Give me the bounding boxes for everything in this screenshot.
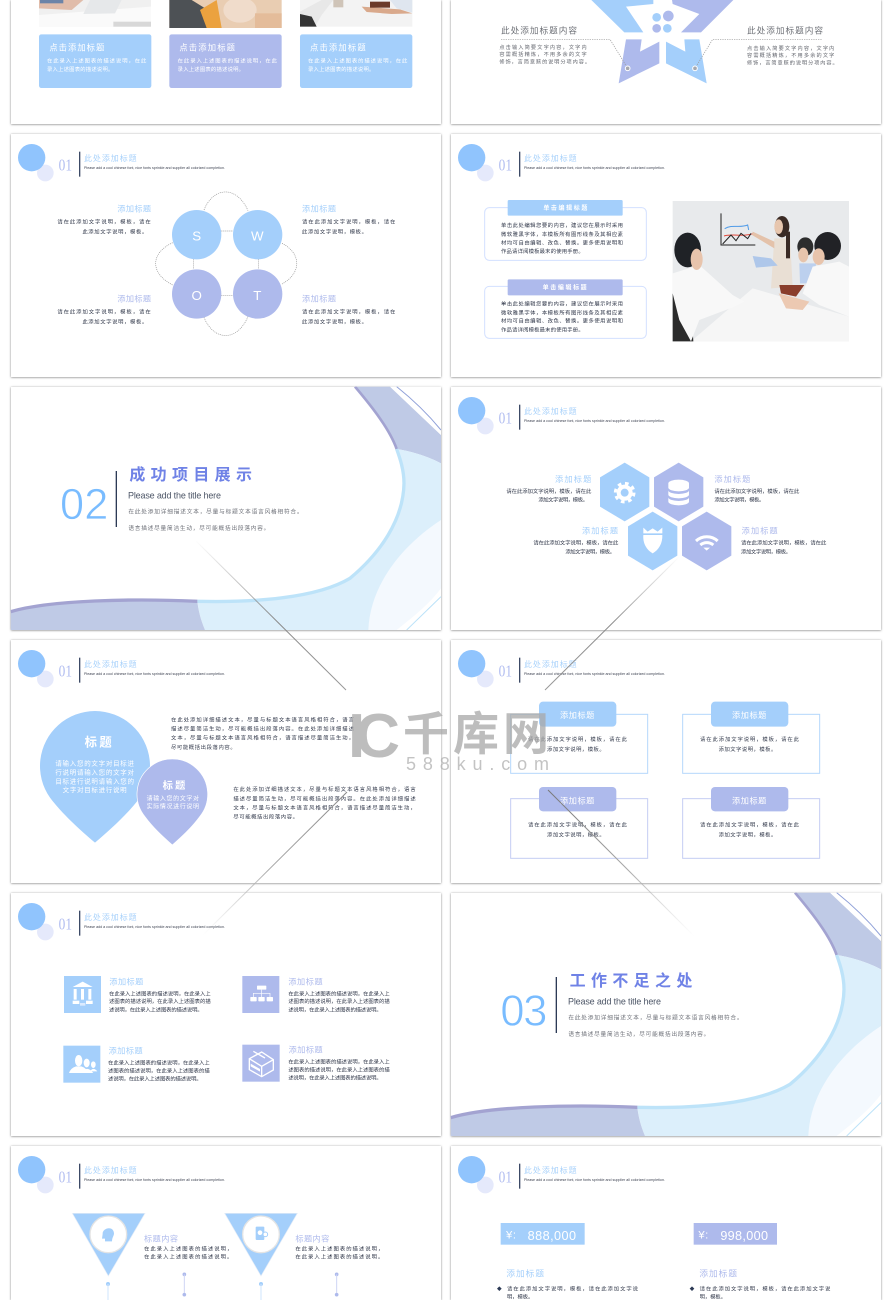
text block: left: 修饰，言简意赅的说明分项内容。 xyxy=(499,57,590,65)
box: bottom left xyxy=(511,787,648,858)
text block: T xyxy=(302,293,395,325)
text block: gear: 请在此添加文字说明，模板，请在此 xyxy=(506,487,592,495)
divider bar xyxy=(116,471,117,527)
price tag: 888,000 xyxy=(501,1223,585,1245)
text block: box: 述说明，在此录入上述图表的描述说明。 xyxy=(288,1074,382,1082)
teardrop: small: 实际情况进行说明 xyxy=(147,803,199,811)
text block: W xyxy=(302,203,395,235)
box: top right: 添加标题 xyxy=(732,710,766,720)
text block: second price: 添加标题 xyxy=(699,1268,737,1279)
card: purple one: 录入上述图表的描述说明。 xyxy=(178,65,244,73)
text block: org chart: 在此录入上述图表的描述说明，在此录入上 xyxy=(288,989,390,997)
slide header: 此处添加标题 xyxy=(84,1165,137,1175)
slide header: Please add a cool chinese font, nice fonts sprinkle and supplier all colorized completion. xyxy=(524,419,665,423)
text block: gear: 添加标题 xyxy=(555,474,591,484)
paragraph: upper: 在此处添加详细描述文本，尽量与标题文本语言风格相符合，语言 xyxy=(171,715,355,723)
card: purple one xyxy=(169,34,282,88)
text block: org chart xyxy=(288,976,390,1013)
timeline connector: first purple xyxy=(182,1272,186,1296)
decorative curved background xyxy=(451,893,881,1136)
text box: second: 单击此处编辑您要的内容，建议您在展示时采用 xyxy=(501,299,623,307)
slide header: 此处添加标题 xyxy=(524,659,577,669)
slide header xyxy=(18,1156,225,1193)
box: bottom left: 请在此添加文字说明，模板，请在此 xyxy=(528,820,628,828)
slide: four titled boxes xyxy=(451,640,881,883)
slide header: Please add a cool chinese font, nice fonts sprinkle and supplier all colorized completion. xyxy=(524,166,665,170)
chart: SWOT dotted loops xyxy=(156,192,297,336)
text block: O: 此添加文字说明，模板。 xyxy=(82,317,147,325)
chart node: T xyxy=(233,269,282,319)
teardrop: large: 文字对目标进行说明 xyxy=(63,785,127,794)
text block: wifi: 请在此添加文字说明，模板，请在此 xyxy=(741,539,827,547)
text block: org chart: 添加标题 xyxy=(288,976,323,986)
card: blue one: 点击添加标题 xyxy=(49,43,105,53)
slide: teardrops xyxy=(11,640,441,883)
box: top left: 添加文字说明，模板。 xyxy=(547,745,605,753)
icon: box xyxy=(242,1045,280,1082)
text block: T: 请在此添加文字说明，模板，请在 xyxy=(302,307,395,315)
card: second blue one: 点击添加标题 xyxy=(310,43,366,53)
box: top right: 请在此添加文字说明，模板，请在此 xyxy=(700,735,800,743)
section description: 在此处添加详细描述文本，尽量与标题文本语言风格相符合。 xyxy=(568,1014,743,1022)
paragraph: lower: 描述尽量简洁生动，尽可能概括出段落内容。在此处添加详细描述 xyxy=(233,794,416,802)
slide header: 01 xyxy=(59,1167,72,1186)
text block: box: 在此录入上述图表的描述说明，在此录入上 xyxy=(288,1058,390,1066)
chart node: O: O xyxy=(191,288,202,303)
text box: second: 材均可自由编辑、改色、替换。更多使用说明和 xyxy=(501,317,623,325)
slide header xyxy=(18,650,225,687)
text block: bank xyxy=(109,976,211,1013)
hexagon: shield xyxy=(628,512,677,570)
photo: meeting table xyxy=(300,0,412,27)
price tag: 888,000: ¥: xyxy=(505,1230,516,1242)
text block: wifi xyxy=(741,526,827,555)
timeline connector: first blue xyxy=(106,1282,110,1300)
section number: 02 xyxy=(60,481,108,529)
chart node: W: W xyxy=(251,229,264,244)
text block: first price: 请在此添加文字说明，模板，请在此添加文字说 xyxy=(507,1285,639,1293)
text block: O: 请在此添加文字说明，模板，请在 xyxy=(57,307,151,315)
card: second blue one: 在此录入上述图表的描述说明，在此 xyxy=(308,57,408,65)
text box: first: 单击此处编辑您要的内容，建议您在展示时采用 xyxy=(501,221,623,229)
text block: left: 容需概括精炼，不用多余的文字 xyxy=(499,50,587,58)
section description: 语言描述尽量简洁生动，尽可能概括出段落内容。 xyxy=(128,524,269,532)
text block: right: 容需概括精炼，不用多余的文字 xyxy=(747,51,834,59)
text block: box: 述图表的描述说明，在此录入上述图表的描 xyxy=(288,1065,390,1073)
triangle: device icon xyxy=(225,1213,297,1276)
star: four arrow pieces xyxy=(591,0,733,83)
text block: shield xyxy=(533,526,619,555)
wall chart xyxy=(721,213,755,245)
slide: four icon items xyxy=(11,893,441,1136)
text block: people: 在此录入上述图表的描述说明，在此录入上 xyxy=(108,1059,210,1067)
slide header: Please add a cool chinese font, nice fonts sprinkle and supplier all colorized completion. xyxy=(84,672,225,676)
timeline connector: second blue xyxy=(259,1282,263,1300)
icon: org chart xyxy=(242,976,279,1013)
box: top left xyxy=(511,702,648,773)
paragraph: lower: 在此处添加详细描述文本，尽量与标题文本语言风格相符合，语言 xyxy=(233,785,416,793)
timeline connector: second purple xyxy=(335,1272,338,1296)
text block: left xyxy=(499,25,590,65)
card: second blue one: 录入上述图表的描述说明。 xyxy=(308,65,374,73)
teardrop: large: 请输入您的文字对目标进 xyxy=(55,759,135,768)
section title: 工作不足之处 xyxy=(570,971,692,990)
price tag: 998,000: ¥: xyxy=(697,1230,708,1242)
watermark: diagonal lines xyxy=(195,540,694,936)
text box: second: 单击编辑标题 xyxy=(543,284,587,292)
section description xyxy=(568,1014,743,1038)
text block: left: 此处添加标题内容 xyxy=(501,25,577,36)
card: blue one: 录入上述图表的描述说明。 xyxy=(47,65,113,73)
section description: 在此处添加详细描述文本，尽量与标题文本语言风格相符合。 xyxy=(128,508,303,516)
text block: second xyxy=(295,1234,383,1261)
text block: first: 标题内容 xyxy=(144,1234,178,1244)
text block: gear xyxy=(506,474,592,503)
text block: first price xyxy=(497,1268,639,1300)
text block: first: 在此录入上述图表的描述说明， xyxy=(144,1244,232,1252)
paragraph: upper: 文本，尽量与标题文本语言风格相符合，语言描述尽量简洁生动， xyxy=(171,733,354,741)
text block: box: 添加标题 xyxy=(289,1045,323,1055)
text block: wifi: 添加文字说明，模板。 xyxy=(741,547,791,555)
slide: SWOT xyxy=(11,134,441,377)
slide header xyxy=(458,397,665,434)
text block: database: 请在此添加文字说明，模板，请在此 xyxy=(714,487,800,495)
slide header: Please add a cool chinese font, nice fonts sprinkle and supplier all colorized completion. xyxy=(84,925,225,929)
box: bottom right xyxy=(683,787,820,858)
text block: right xyxy=(747,25,838,66)
slide header xyxy=(18,903,225,940)
text block: shield: 添加标题 xyxy=(582,526,618,536)
text block: W: 此添加文字说明，模板。 xyxy=(302,227,367,235)
text block: first xyxy=(144,1234,232,1261)
section description: 语言描述尽量简洁生动，尽可能概括出段落内容。 xyxy=(568,1030,709,1038)
price tag: 998,000 xyxy=(694,1223,777,1245)
text block: right: 此处添加标题内容 xyxy=(747,25,823,36)
hexagon: wifi xyxy=(682,512,731,570)
watermark: logo text: 588ku.com xyxy=(406,754,549,774)
slide header: 01 xyxy=(499,1167,512,1186)
text block: first: 在此录入上述图表的描述说明。 xyxy=(144,1253,232,1261)
text box: first: 微软雅黑字体，本模板所有图形线条及其相应素 xyxy=(501,230,624,238)
watermark: logo text xyxy=(348,702,549,774)
slide header: Please add a cool chinese font, nice fonts sprinkle and supplier all colorized completion. xyxy=(84,1178,225,1182)
box: top left: 添加标题 xyxy=(560,710,594,720)
leader line: right xyxy=(693,39,822,71)
text block: bank: 述说明，在此录入上述图表的描述说明。 xyxy=(109,1005,203,1013)
slide: star diagram xyxy=(451,0,881,124)
text box: first xyxy=(485,200,646,260)
decorative curved background xyxy=(11,387,441,630)
teardrop: small xyxy=(137,759,208,845)
slide header: 此处添加标题 xyxy=(524,153,577,163)
text block: second: 在此录入上述图表的描述说明。 xyxy=(295,1253,383,1261)
text block: W: 添加标题 xyxy=(302,203,336,213)
triangle: head icon xyxy=(72,1213,145,1276)
watermark: logo text: IC xyxy=(348,702,400,771)
watermark: logo text: 千库网 xyxy=(403,708,549,760)
chart node: T: T xyxy=(253,288,261,303)
text block: wifi: 添加标题 xyxy=(742,526,778,536)
text block: right: 点击输入简要文字内容，文字内 xyxy=(747,44,834,52)
text block: people xyxy=(108,1046,210,1083)
text block: S xyxy=(57,203,151,235)
text block: people: 添加标题 xyxy=(109,1046,143,1056)
text block: W: 请在此添加文字说明，模板，请在 xyxy=(302,217,395,225)
slide header xyxy=(18,144,225,181)
text block: second price: 请在此添加文字说明，模板，请在此添加文字说 xyxy=(700,1285,831,1293)
text box: second: 微软雅黑字体，本模板所有图形线条及其相应素 xyxy=(501,308,624,316)
card: blue one xyxy=(39,34,151,88)
section number: 03 xyxy=(500,987,547,1035)
text box: first: 材均可自由编辑、改色、替换。更多使用说明和 xyxy=(501,239,623,247)
slide header: 此处添加标题 xyxy=(84,912,137,922)
paragraph: lower: 尽可能概括出段落内容。 xyxy=(233,813,298,821)
text block: bank: 述图表的描述说明，在此录入上述图表的描 xyxy=(109,997,211,1005)
section title: 成功项目展示 xyxy=(129,465,252,484)
box: bottom right: 添加文字说明，模板。 xyxy=(719,830,776,838)
text block: T: 此添加文字说明，模板。 xyxy=(302,317,367,325)
box: top left: 请在此添加文字说明，模板，请在此 xyxy=(528,735,628,743)
teardrop: large: 标题 xyxy=(85,735,112,750)
box: bottom right: 添加标题 xyxy=(732,795,766,805)
slide: prices xyxy=(451,1146,881,1300)
text block: first price: 添加标题 xyxy=(506,1268,544,1279)
text block: O: 添加标题 xyxy=(117,293,151,303)
chart node: O xyxy=(172,269,221,319)
slide: hexagons xyxy=(451,387,881,630)
teardrop: small: 标题 xyxy=(163,779,186,792)
icon: bank xyxy=(64,976,101,1013)
slide header: 此处添加标题 xyxy=(84,153,137,163)
chart node: W xyxy=(233,210,282,259)
text block: second price xyxy=(690,1268,831,1300)
text box: first: 作品请详阅模板最末的使用手册。 xyxy=(501,247,584,255)
box: top right xyxy=(683,702,820,773)
paragraph: upper: 尽可能概括出段落内容。 xyxy=(171,743,236,751)
slide: text boxes and meeting photo xyxy=(451,134,881,377)
section subtitle: Please add the title here xyxy=(128,490,221,500)
icon: people xyxy=(63,1046,100,1083)
hexagon: database xyxy=(654,463,703,521)
box: bottom left: 添加文字说明，模板。 xyxy=(547,830,605,838)
slide header xyxy=(458,144,665,181)
photo: presenter at whiteboard xyxy=(673,201,849,341)
slide header: 01 xyxy=(499,155,512,174)
slide header: 此处添加标题 xyxy=(524,1165,577,1175)
text block: org chart: 述说明，在此录入上述图表的描述说明。 xyxy=(288,1005,382,1013)
slide header: 01 xyxy=(499,661,512,680)
text box: second: 作品请详阅模板最末的使用手册。 xyxy=(501,325,584,333)
text block: S: 此添加文字说明，模板。 xyxy=(82,227,147,235)
paragraph: upper xyxy=(171,715,355,751)
text block: shield: 请在此添加文字说明，模板，请在此 xyxy=(533,539,619,547)
slide header: 01 xyxy=(59,155,72,174)
card: blue one: 在此录入上述图表的描述说明，在此 xyxy=(47,57,147,65)
text block: database: 添加文字说明，模板。 xyxy=(714,495,764,503)
text block: people: 述图表的描述说明，在此录入上述图表的描 xyxy=(108,1066,210,1074)
paragraph: lower: 文本，尽量与标题文本语言风格相符合，语言描述尽量简洁生动， xyxy=(233,803,416,811)
text block: database xyxy=(714,474,800,503)
hexagon: gear xyxy=(600,463,649,521)
text block: second: 标题内容 xyxy=(295,1234,329,1244)
card: purple one: 点击添加标题 xyxy=(179,43,236,53)
slide header: 此处添加标题 xyxy=(84,659,137,669)
text block: second: 在此录入上述图表的描述说明， xyxy=(295,1244,383,1252)
slide: section 03 xyxy=(451,893,881,1136)
section description xyxy=(128,508,303,532)
box: bottom right: 请在此添加文字说明，模板，请在此 xyxy=(700,820,800,828)
slide header: Please add a cool chinese font, nice fonts sprinkle and supplier all colorized completion. xyxy=(84,166,225,170)
text block: gear: 添加文字说明，模板。 xyxy=(538,495,588,503)
box: top right: 添加文字说明，模板。 xyxy=(719,745,776,753)
icon: four dots in the star centre xyxy=(652,11,674,33)
leader line: left xyxy=(501,39,630,71)
slide header: Please add a cool chinese font, nice fonts sprinkle and supplier all colorized completion. xyxy=(524,1178,665,1182)
slide: three photo cards xyxy=(11,0,441,124)
card: purple one: 在此录入上述图表的描述说明，在此 xyxy=(178,57,278,65)
text block: T: 添加标题 xyxy=(302,293,336,303)
teardrop: large: 目标进行说明请输入您的 xyxy=(55,776,135,785)
text block: bank: 在此录入上述图表的描述说明，在此录入上 xyxy=(109,989,211,997)
text block: box xyxy=(288,1045,390,1082)
slide header: 01 xyxy=(59,914,72,933)
text block: left: 点击输入简要文字内容，文字内 xyxy=(499,43,587,51)
teardrop: large: 行说明请输入您的文字对 xyxy=(55,768,135,777)
text block: database: 添加标题 xyxy=(714,474,750,484)
slide: section 02 xyxy=(11,387,441,630)
chart node: S: S xyxy=(192,229,201,244)
slide: triangles timeline xyxy=(11,1146,441,1300)
box: bottom left: 添加标题 xyxy=(560,795,594,805)
text block: bank: 添加标题 xyxy=(109,976,143,986)
slide header: 01 xyxy=(59,661,72,680)
text block: org chart: 述图表的描述说明，在此录入上述图表的描 xyxy=(288,997,390,1005)
slide header xyxy=(458,650,665,687)
slide header: 此处添加标题 xyxy=(524,406,577,416)
text block: S: 添加标题 xyxy=(117,203,151,213)
photo: person at laptop xyxy=(39,0,151,27)
photo: team in jackets xyxy=(169,0,282,28)
chart node: S xyxy=(172,210,221,259)
slide header xyxy=(458,1156,665,1193)
price tag: 888,000: 888,000 xyxy=(528,1229,576,1243)
text box: second xyxy=(485,279,646,338)
text block: shield: 添加文字说明，模板。 xyxy=(565,547,615,555)
paragraph: lower xyxy=(233,785,416,821)
slide header: 01 xyxy=(499,408,512,427)
text block: O xyxy=(57,293,151,325)
teardrop: large xyxy=(40,711,150,843)
text box: first: 单击编辑标题 xyxy=(543,204,587,212)
text block: people: 述说明，在此录入上述图表的描述说明。 xyxy=(108,1075,202,1083)
section subtitle: Please add the title here xyxy=(568,996,661,1006)
teardrop: small: 请输入您的文字对 xyxy=(147,795,199,803)
text block: S: 请在此添加文字说明，模板，请在 xyxy=(57,217,151,225)
price tag: 998,000: 998,000 xyxy=(720,1229,768,1243)
text block: right: 修饰，言简意赅的说明分项内容。 xyxy=(747,58,838,66)
divider bar xyxy=(556,977,557,1033)
slide header: Please add a cool chinese font, nice fonts sprinkle and supplier all colorized completion. xyxy=(524,672,665,676)
card: second blue one xyxy=(300,34,412,88)
paragraph: upper: 描述尽量简洁生动，尽可能概括出段落内容。在此处添加详细描述 xyxy=(171,725,355,733)
